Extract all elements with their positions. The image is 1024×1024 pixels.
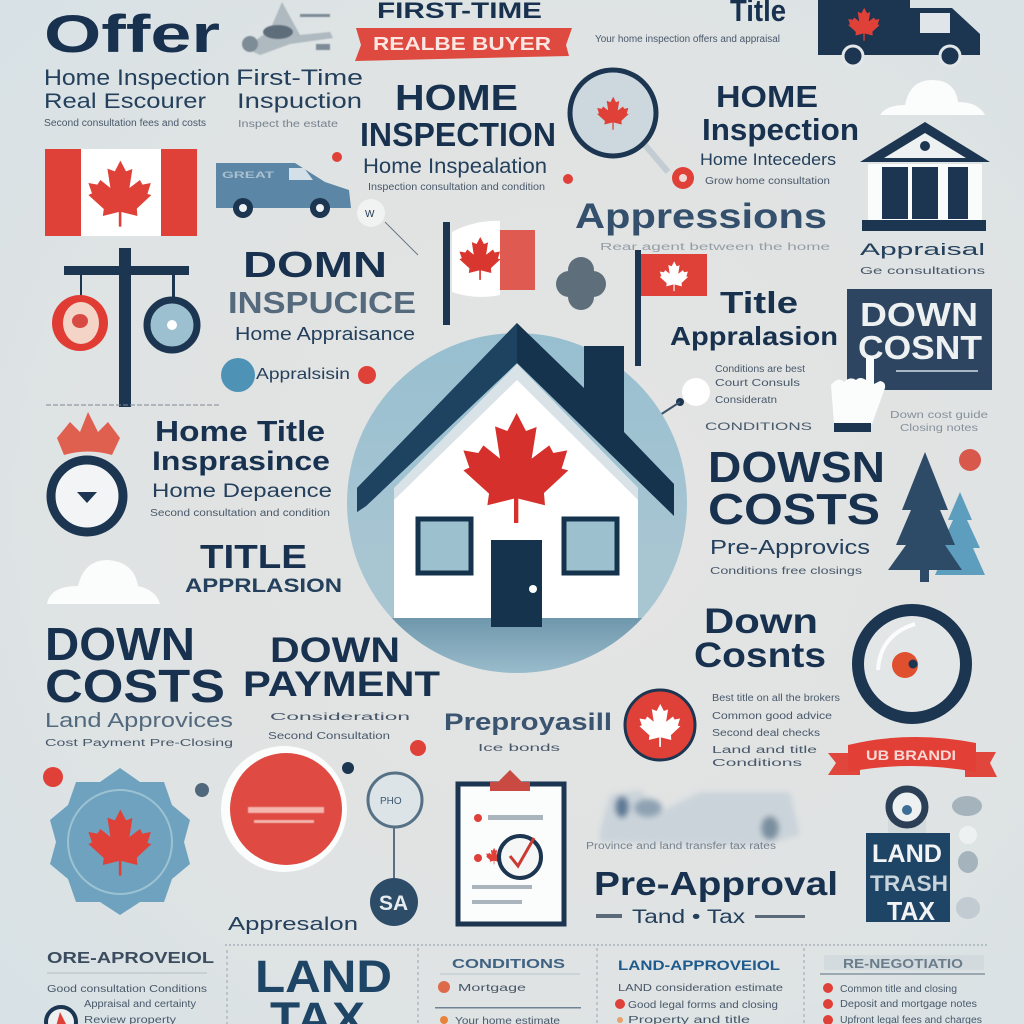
text block: title appraisal left: TITLE <box>200 538 307 575</box>
text block: notes right <box>712 693 840 769</box>
text block: down costs left: Land Approvices <box>45 710 233 732</box>
footer column: re-negotiation: Common title and closing <box>840 984 957 995</box>
icon: clipboard checklist <box>458 770 564 924</box>
icon: connected circles with SA <box>368 773 422 926</box>
text block: appraisal right: Appraisal <box>860 240 985 259</box>
text block: home inspection real estate: Second consultation fees and costs <box>44 118 206 129</box>
icon: faded key <box>242 2 333 55</box>
text block: down costs right: DOWSN <box>708 443 885 492</box>
icon: land transfer tax box: TRASH <box>870 871 948 896</box>
text block: down costs small: Cosnts <box>694 636 826 675</box>
icon: maple leaf badge <box>50 768 190 915</box>
icon: red pins <box>332 152 573 184</box>
icon: house with maple leaf <box>357 323 674 627</box>
text block: down inspection: INSPUCICE <box>228 285 416 320</box>
icon: clock <box>51 460 123 532</box>
text block: notes right: Second deal checks <box>712 728 820 739</box>
icon: land transfer tax box: TAX <box>887 896 936 926</box>
text block: pre-approval center: Preproyasill <box>444 709 612 736</box>
text block: pre-approval: Pre-Approval <box>594 865 838 902</box>
text block: notes right: Conditions <box>712 758 802 769</box>
text block: conditions <box>705 364 812 433</box>
footer column: conditions: Mortgage <box>458 983 527 994</box>
ribbon: brand: UB BRANDI <box>866 747 956 763</box>
heading: appressions <box>575 197 831 253</box>
text block: home inspection center: Inspection consultation and condition <box>368 182 545 193</box>
text block: caption under box: Closing notes <box>900 423 978 434</box>
icon: center flag <box>443 221 535 325</box>
icon: red speech circle <box>221 746 347 872</box>
text block: home inspection right: HOME <box>716 79 818 114</box>
heading: title top: Your home inspection offers and appraisal <box>595 34 780 45</box>
text block: conditions: Consideratn <box>715 395 777 406</box>
text block: down costs right <box>708 443 885 577</box>
text block: appraisal right <box>860 240 985 277</box>
text block: home inspection real estate <box>44 65 230 129</box>
text block: home inspection center: HOME <box>395 77 518 118</box>
icon: pointing hand <box>831 356 885 432</box>
banner: first-time real estate buyer: REALBE BUYER <box>373 34 551 54</box>
text block: home inspection right <box>700 79 859 187</box>
icon: connected circles with SA: SA <box>379 892 408 915</box>
footer column: re-negotiation: RE-NEGOTIATIO <box>843 956 963 971</box>
icon: land transfer tax box: LAND <box>872 840 942 868</box>
text block: pre-approval center <box>444 709 612 754</box>
text block: notes right: Land and title <box>712 745 818 756</box>
text block: home title insurance: Home Title <box>155 416 325 448</box>
heading: appressions: Rear agent between the home <box>600 242 831 253</box>
ribbon: brand <box>828 737 997 777</box>
label: appraisal bottom: Appresalon <box>228 914 358 934</box>
text block: title appraisal left <box>185 538 342 597</box>
icon: gauge circle <box>858 610 966 718</box>
icon: red leaf medallion <box>625 690 695 760</box>
icon: pin marker <box>660 378 710 415</box>
icon: pine trees <box>888 449 985 582</box>
heading: appressions: Appressions <box>575 197 827 236</box>
text block: home title insurance: Second consultation and condition <box>150 508 330 519</box>
footer heading: land tax <box>255 951 392 1024</box>
decorative rule <box>225 944 988 946</box>
icon: dots <box>43 740 426 797</box>
text block: conditions: Court Consuls <box>715 378 800 389</box>
text block: down costs right: COSTS <box>708 485 880 534</box>
icon: crown leaf <box>57 412 120 455</box>
icon: delivery truck <box>818 0 980 66</box>
footer column: land approval: Good legal forms and closing <box>628 1000 778 1011</box>
text block: down costs left: DOWN <box>45 618 195 670</box>
text block: notes right: Best title on all the brokers <box>712 693 840 704</box>
text block: down payment: Second Consultation <box>268 731 390 742</box>
text block: down costs left: COSTS <box>45 660 225 712</box>
text block: down costs small: Down <box>704 602 818 641</box>
footer column: re-negotiation: Deposit and mortgage notes <box>840 999 977 1010</box>
icon: connected circles with SA: PHO <box>380 796 402 807</box>
illustration: faded map: Province and land transfer tax rates <box>586 841 776 852</box>
icon: faded side glyphs <box>952 796 982 919</box>
banner: first-time real estate buyer <box>355 0 572 61</box>
footer column: conditions: CONDITIONS <box>452 956 565 971</box>
text block: down costs left <box>45 618 233 749</box>
text block: down payment <box>243 631 440 742</box>
icon: small pin circle: W <box>365 209 375 220</box>
footer column: land approval: LAND consideration estimate <box>618 983 784 994</box>
footer heading: pre-approval: Appraisal and certainty <box>84 999 196 1010</box>
footer column: land approval <box>615 957 784 1024</box>
text block: title appraisal: Appralasion <box>670 321 838 351</box>
text block: down costs small <box>694 602 826 675</box>
text block: pre-approval center: Ice bonds <box>478 743 560 754</box>
footer heading: pre-approval: ORE-APROVEIOL <box>47 950 214 967</box>
text block: home inspection right: Home Inteceders <box>700 150 836 169</box>
text block: first-time inspection: Inspuction <box>237 90 362 113</box>
text block: appraisal right: Ge consultations <box>860 266 985 277</box>
text block: down inspection: Appralsisin <box>256 366 350 383</box>
icon: balance scale <box>52 248 197 407</box>
icon: cloud left <box>47 560 160 604</box>
text block: home inspection real estate: Home Inspection <box>44 65 230 90</box>
text block: home inspection right: Grow home consultation <box>705 176 830 187</box>
text block: home title insurance: Home Depaence <box>152 481 332 502</box>
icon: small pin circle <box>357 199 418 255</box>
icon: blue and red dots <box>221 358 376 392</box>
text block: home inspection real estate: Real Escourer <box>44 90 206 113</box>
text block: home inspection center <box>360 77 556 193</box>
text block: down payment: DOWN <box>270 631 400 670</box>
text block: first-time inspection: Inspect the estate <box>238 119 339 130</box>
box: down cost <box>847 289 992 390</box>
text block: pre-approval <box>594 865 838 928</box>
footer heading: pre-approval: Good consultation Conditions <box>47 984 207 995</box>
footer column: land approval: LAND-APPROVEIOL <box>618 957 781 973</box>
footer heading: land tax: LAND <box>255 951 392 1002</box>
text block: down payment: Consideration <box>270 712 410 723</box>
icon: gray flower <box>556 257 606 310</box>
icon: land transfer tax box <box>866 789 950 926</box>
text block: title appraisal <box>670 285 838 351</box>
text block: pre-approval: Tand • Tax <box>632 907 746 928</box>
text block: first-time inspection <box>236 65 363 130</box>
icon: main circle backdrop <box>340 333 690 678</box>
footer column: re-negotiation <box>820 955 985 1024</box>
text block: first-time inspection: First-Time <box>236 65 363 90</box>
text block: down inspection <box>228 244 416 383</box>
icon: magnifying glass <box>570 70 694 189</box>
box: down cost: COSNT <box>858 329 982 366</box>
icon: bank building <box>860 122 990 231</box>
text block: down costs left: Cost Payment Pre-Closing <box>45 738 233 749</box>
text block: down payment: PAYMENT <box>243 665 440 704</box>
text block: down costs right: Pre-Approvics <box>710 537 870 559</box>
text block: down costs right: Conditions free closings <box>710 566 862 577</box>
text block: down inspection: DOMN <box>243 244 387 285</box>
footer column: conditions <box>435 956 581 1024</box>
decorative rule <box>46 404 220 406</box>
text block: home inspection center: INSPECTION <box>360 116 556 153</box>
illustration: faded map <box>586 790 800 852</box>
text block: conditions: CONDITIONS <box>705 421 812 433</box>
text block: down inspection: Home Appraisance <box>235 324 415 344</box>
text block: title appraisal: Title <box>720 285 798 320</box>
text block: home title insurance <box>150 416 332 519</box>
text block: notes right: Common good advice <box>712 711 833 722</box>
text block: conditions: Conditions are best <box>715 364 805 375</box>
text block: caption under box <box>890 410 989 434</box>
icon: canadian flag <box>45 149 197 236</box>
text block: caption under box: Down cost guide <box>890 410 989 421</box>
text block: home inspection right: Inspection <box>702 112 859 147</box>
heading: title top <box>595 0 786 45</box>
icon: red flag on pole <box>635 250 707 366</box>
heading: Offer: Offer <box>44 5 220 64</box>
icon: van <box>216 163 351 218</box>
icon: cloud top right <box>880 80 985 115</box>
icon: van: GREAT <box>222 170 275 180</box>
text block: title appraisal left: APPRLASION <box>185 576 342 597</box>
box: down cost: DOWN <box>860 296 978 333</box>
text block: home title insurance: Insprasince <box>152 446 330 476</box>
text block: home inspection center: Home Inspealation <box>363 155 547 178</box>
footer heading: pre-approval <box>46 950 214 1024</box>
